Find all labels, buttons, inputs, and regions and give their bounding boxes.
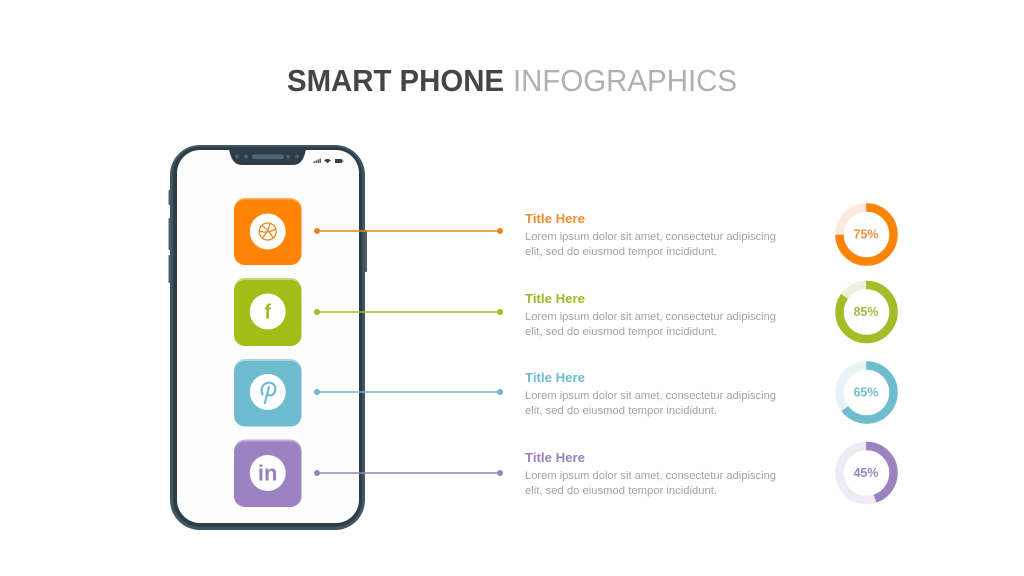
text block: item 4: Title Here (525, 450, 585, 465)
text block: item 2: Title Here (525, 291, 585, 306)
connector: green (314, 309, 503, 315)
smartphone (168, 145, 367, 530)
text block: item 1: Title Here (525, 211, 585, 226)
text block: item 3: Title Here (525, 370, 585, 385)
text block: item 1 (525, 211, 776, 258)
donut chart: 65%: 65% (853, 386, 879, 400)
donut chart: 75%: 75% (853, 228, 879, 242)
phone notch (229, 149, 306, 165)
icon: pinterest tile (234, 359, 302, 426)
donut chart: 75% (840, 208, 894, 262)
connector: orange (314, 228, 503, 234)
title (287, 63, 737, 98)
title: SMART PHONE (287, 63, 504, 98)
text block: item 3 (525, 370, 776, 417)
donut chart: 65% (840, 366, 894, 420)
donut chart: 85% (840, 285, 894, 339)
text block: item 3: elit, sed do eiusmod tempor incididunt. (525, 405, 717, 417)
icon: linkedin tile: in (258, 460, 277, 486)
text block: item 2 (525, 291, 776, 338)
icon: dribbble tile (234, 198, 302, 265)
icon: linkedin tile (234, 440, 302, 507)
connector: purple (314, 470, 503, 476)
title: INFOGRAPHICS (513, 63, 737, 98)
donut chart: 85%: 85% (853, 305, 879, 319)
text block: item 3: Lorem ipsum dolor sit amet, consectetur adipiscing (525, 390, 776, 402)
icon: facebook tile (234, 278, 302, 346)
status icons (314, 158, 343, 163)
text block: item 2: Lorem ipsum dolor sit amet, consectetur adipiscing (525, 311, 776, 323)
text block: item 1: Lorem ipsum dolor sit amet, consectetur adipiscing (525, 231, 776, 243)
text block: item 2: elit, sed do eiusmod tempor incididunt. (525, 326, 717, 338)
donut chart: 45%: 45% (853, 466, 879, 480)
text block: item 4: Lorem ipsum dolor sit amet, consectetur adipiscing (525, 470, 776, 482)
icon: facebook tile: f (264, 302, 271, 324)
connector: blue (314, 389, 503, 395)
text block: item 4: elit, sed do eiusmod tempor incididunt. (525, 485, 717, 497)
text block: item 4 (525, 450, 776, 497)
text block: item 1: elit, sed do eiusmod tempor incididunt. (525, 246, 717, 258)
donut chart: 45% (840, 446, 894, 500)
